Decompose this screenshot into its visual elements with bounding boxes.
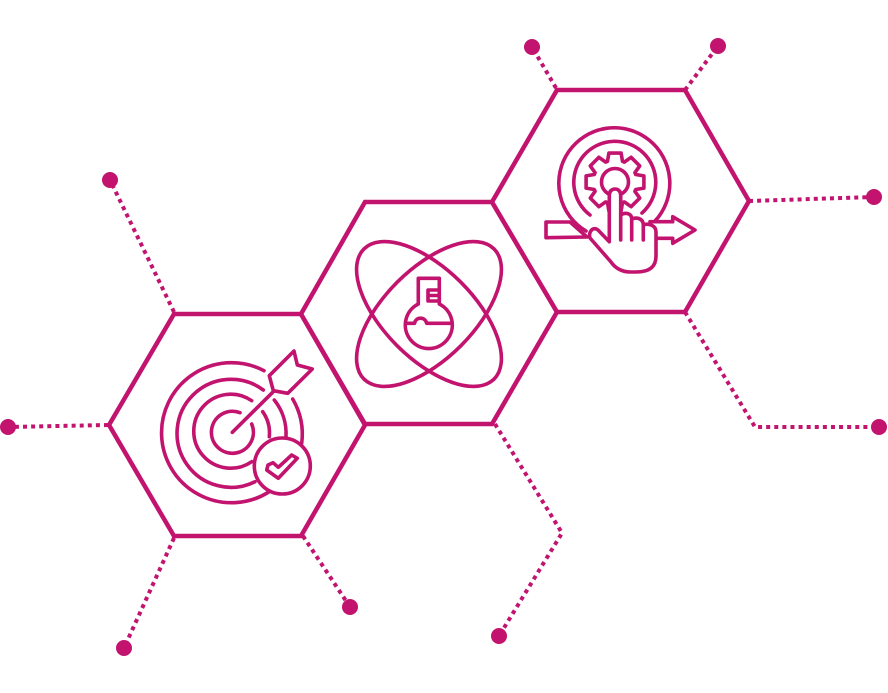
icon: target with arrow and check [162, 351, 312, 503]
outer and inner rings [559, 128, 670, 231]
connector: right hexagon to right dot [749, 189, 882, 205]
hexagon: left [109, 314, 365, 536]
icon: atom with flask [332, 217, 526, 411]
hexagon: right [492, 90, 749, 312]
connector: right hexagon to lower-right dot [685, 312, 887, 435]
dart [232, 351, 312, 432]
connector: left hexagon to bottom-left dot [116, 538, 174, 656]
atom orbits [332, 217, 526, 411]
check badge [254, 438, 310, 494]
gear [586, 153, 644, 211]
hexagon: middle [301, 202, 557, 424]
connector: middle hexagon to bottom dot [491, 424, 562, 644]
connector: right hexagon to top-left dot [524, 39, 556, 88]
connector: left hexagon to far-left dot [0, 419, 108, 435]
finger lines [621, 215, 643, 240]
icon: hand pressing gear with arrow [546, 128, 695, 272]
connector: left hexagon to upper-left dot [102, 172, 174, 312]
target rings [162, 363, 302, 503]
connector: right hexagon to top-right dot [685, 38, 726, 90]
pointing hand [590, 189, 656, 272]
connector: left hexagon to bottom-right dot [303, 536, 358, 615]
flask [405, 278, 452, 349]
arrow [546, 217, 695, 243]
